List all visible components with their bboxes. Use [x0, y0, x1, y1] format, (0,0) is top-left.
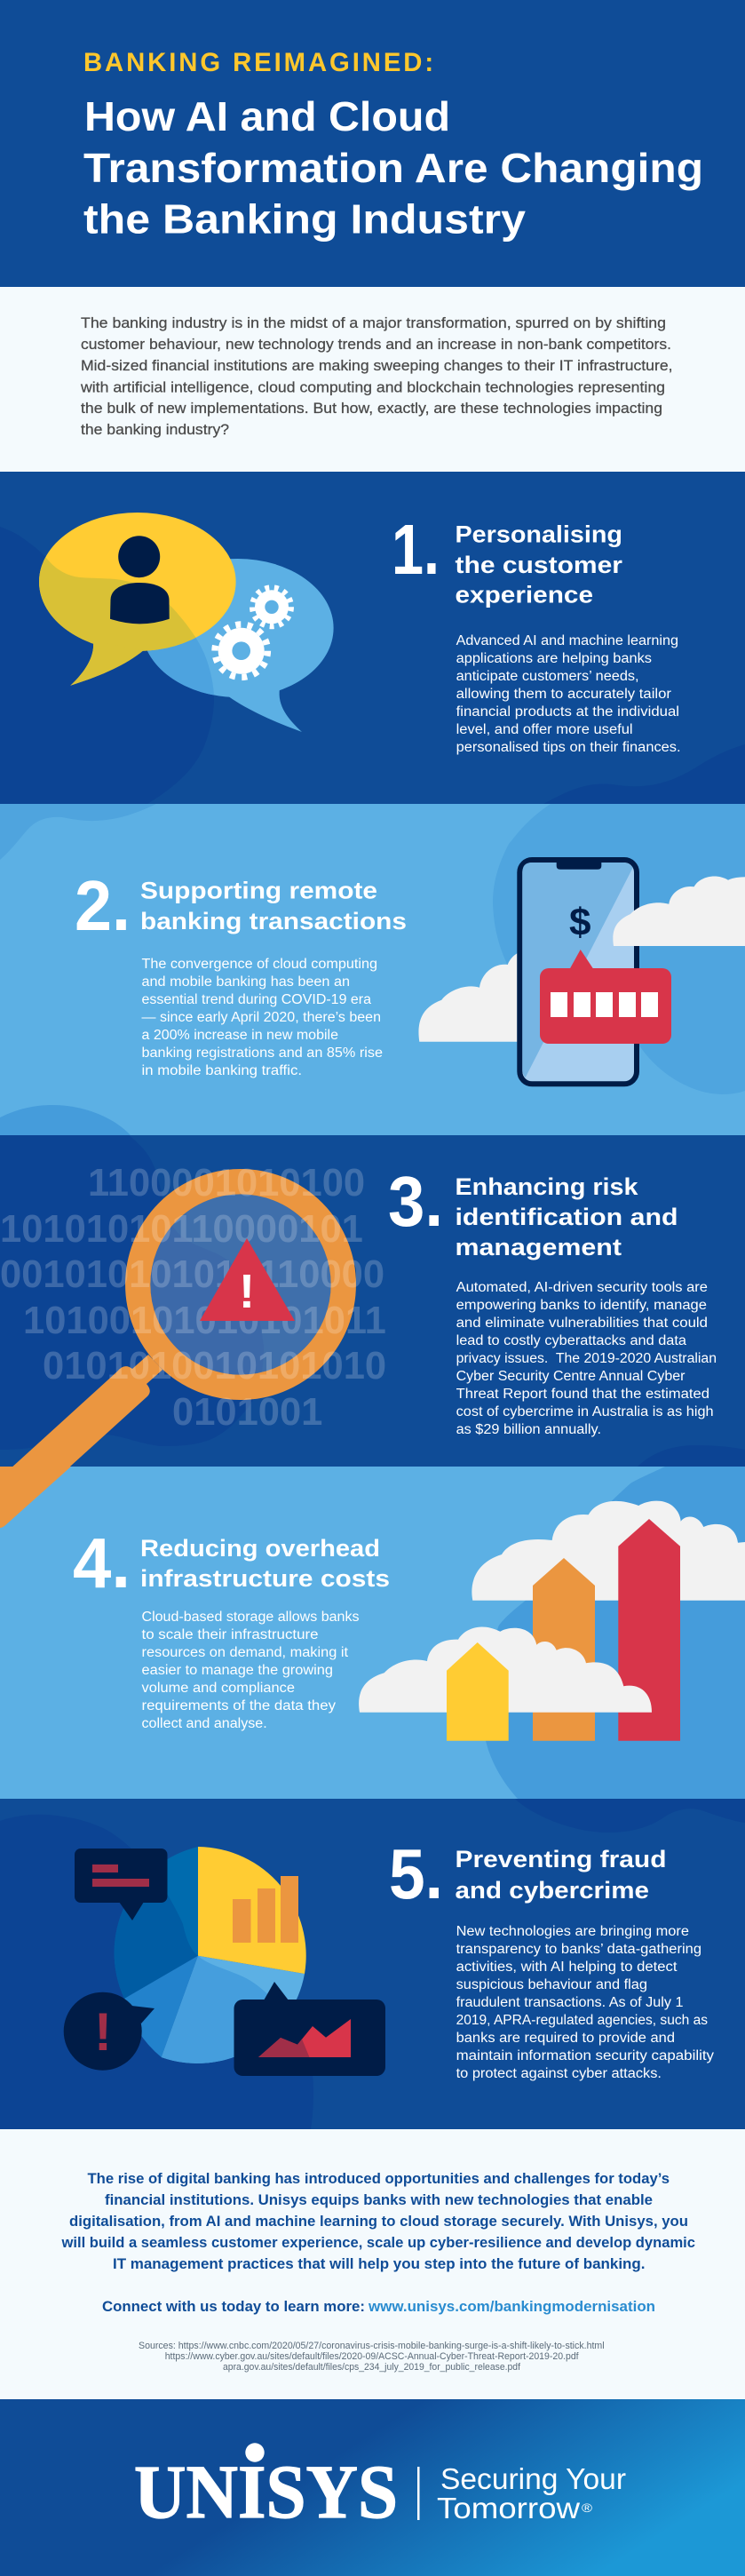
binary digits: 10101010110000101	[0, 1208, 363, 1251]
body text 5	[456, 1924, 714, 2081]
panel: section 2 remote banking	[0, 804, 745, 1135]
icon: warning triangle	[200, 1238, 295, 1321]
closing text: will build a seamless customer experience, scale up cyber-resilience and develop dynamic	[61, 2234, 695, 2251]
body text 3	[456, 1280, 717, 1437]
body text 2: in mobile banking traffic.	[142, 1063, 302, 1078]
body text 3: Threat Report found that the estimated	[456, 1387, 709, 1402]
icon: speech bubbles	[39, 513, 334, 732]
icon: alert speech bubble: !	[94, 2002, 112, 2062]
body text 2	[142, 957, 383, 1078]
body text 1: allowing them to accurately tailor	[456, 687, 671, 702]
body text 4: resources on demand, making it	[142, 1645, 349, 1660]
intro text: customer behaviour, new technology trends and an increase in non-bank competitors.	[81, 336, 671, 353]
body text 4: to scale their infrastructure	[142, 1627, 318, 1642]
closing text	[61, 2170, 695, 2272]
panel: section 3 risk management	[0, 1135, 745, 1528]
body text 4: volume and compliance	[142, 1681, 295, 1696]
title	[83, 93, 703, 242]
heading 1: the customer	[455, 552, 623, 578]
heading 5: Preventing fraud	[455, 1846, 666, 1872]
heading 2	[140, 878, 407, 934]
body text 5: New technologies are bringing more	[456, 1924, 689, 1939]
body text 5: activities, with AI helping to detect	[456, 1960, 678, 1975]
panel: section 4 infrastructure costs	[0, 1467, 745, 1799]
panel: introduction	[0, 287, 745, 472]
body text 4	[142, 1610, 360, 1731]
heading 1: experience	[455, 581, 593, 608]
illustration: smartphone	[519, 860, 637, 1084]
body text 1	[456, 633, 681, 755]
body text 1: personalised tips on their finances.	[456, 740, 681, 755]
panel: section 1 personalising	[0, 472, 745, 804]
body text 4: requirements of the data they	[142, 1698, 336, 1713]
heading 3: Enhancing risk	[455, 1173, 639, 1200]
binary digits: 001010101010110000	[0, 1253, 384, 1296]
body text 4: Cloud-based storage allows banks	[142, 1610, 360, 1625]
panel: conclusion	[0, 2129, 745, 2399]
number 4: 4.	[73, 1523, 131, 1602]
closing text: The rise of digital banking has introduced opportunities and challenges for today’s	[87, 2170, 670, 2187]
body text 2: and mobile banking has been an	[142, 974, 350, 990]
icon: warning triangle: !	[239, 1265, 255, 1318]
magnifier handle	[0, 1355, 162, 1528]
body text 2: The convergence of cloud computing	[142, 957, 377, 972]
body text 5: to protect against cyber attacks.	[456, 2066, 662, 2081]
tagline	[437, 2462, 626, 2524]
heading 5: and cybercrime	[455, 1877, 649, 1904]
tagline: ®	[582, 2500, 593, 2515]
heading 3: management	[455, 1234, 622, 1260]
sources: Sources: https://www.cnbc.com/2020/05/27/coronavirus-crisis-mobile-banking-surge-is-a-shift-likely-to-stick.html	[139, 2341, 605, 2351]
icon: password speech bubble	[540, 950, 671, 1044]
intro text: the banking industry?	[81, 421, 229, 438]
icon: text speech bubble	[75, 1849, 167, 1920]
closing text: financial institutions. Unisys equips banks with new technologies that enable	[105, 2191, 653, 2208]
call to action: www.unisys.com/bankingmodernisation	[368, 2298, 655, 2315]
intro text: the bulk of new implementations. But how, exactly, are these technologies impacting	[81, 400, 662, 417]
logo divider	[417, 2467, 419, 2520]
binary digits: 1100001010100	[88, 1162, 365, 1205]
sources: https://www.cyber.gov.au/sites/default/files/2020-09/ACSC-Annual-Cyber-Threat-Report-2019-20.pdf	[165, 2351, 579, 2362]
number 1: 1.	[392, 510, 440, 589]
sources: apra.gov.au/sites/default/files/cps_234_july_2019_for_public_release.pdf	[223, 2362, 521, 2373]
call to action: Connect with us today to learn more:	[102, 2298, 365, 2315]
body text 2: banking registrations and an 85% rise	[142, 1046, 383, 1061]
illustration: left cloud	[418, 953, 517, 1042]
heading 4: Reducing overhead	[140, 1535, 380, 1562]
logo: Unisys: UNISYS	[134, 2449, 398, 2534]
icon: dollar sign: $	[569, 901, 591, 944]
body text 5: transparency to banks’ data-gathering	[456, 1942, 701, 1957]
body text 3: as $29 billion annually.	[456, 1422, 601, 1437]
body text 5: 2019, APRA-regulated agencies, such as	[456, 2013, 708, 2028]
closing text: digitalisation, from AI and machine learning to cloud storage securely. With Unisys, you	[69, 2213, 688, 2230]
illustration: yellow arrow	[447, 1642, 509, 1741]
intro text	[80, 314, 673, 438]
body text 5: suspicious behaviour and flag	[456, 1977, 647, 1992]
body text 4: easier to manage the growing	[142, 1663, 333, 1678]
heading 1: Personalising	[455, 521, 622, 547]
body text 2: essential trend during COVID-19 era	[142, 992, 371, 1007]
heading 3	[455, 1173, 678, 1260]
heading 4	[140, 1535, 390, 1592]
body text 3: Cyber Security Centre Annual Cyber	[456, 1369, 686, 1384]
icon: area chart bubble	[234, 1982, 385, 2076]
binary digits: 10100101010101011	[23, 1300, 386, 1342]
title: the Banking Industry	[83, 195, 526, 242]
body text 5: banks are required to provide and	[456, 2031, 675, 2046]
illustration: back cloud	[472, 1501, 745, 1601]
heading 5	[455, 1846, 666, 1904]
binary digits: 0101001	[172, 1391, 322, 1434]
sources	[139, 2341, 605, 2373]
body text 5: maintain information security capability	[456, 2048, 714, 2063]
panel: header	[0, 0, 745, 287]
illustration: orange arrow	[533, 1558, 595, 1741]
tagline: Tomorrow	[437, 2492, 580, 2524]
heading 3: identification and	[455, 1204, 678, 1230]
illustration: red arrow	[618, 1519, 680, 1741]
pie chart	[115, 1847, 306, 2063]
heading 2: banking transactions	[140, 908, 407, 934]
panel: section 5 fraud and cybercrime	[0, 1799, 745, 2129]
body text 1: level, and offer more useful	[456, 722, 633, 737]
closing text: IT management practices that will help you step into the future of banking.	[113, 2255, 645, 2272]
tagline: Securing Your	[440, 2462, 626, 2495]
intro text: Mid-sized financial institutions are making sweeping changes to their IT infrastructure,	[81, 357, 673, 374]
body text 1: applications are helping banks	[456, 651, 652, 666]
body text 2: a 200% increase in new mobile	[142, 1028, 338, 1043]
heading 4: infrastructure costs	[140, 1565, 390, 1592]
illustration: right cloud	[613, 877, 745, 946]
binary digits	[0, 1162, 386, 1434]
illustration: front cloud	[359, 1626, 652, 1713]
body text 5: fraudulent transactions. As of July 1	[456, 1995, 684, 2010]
body text 1: Advanced AI and machine learning	[456, 633, 678, 648]
icon: alert speech bubble	[64, 1992, 155, 2071]
body text 3: cost of cybercrime in Australia is as high	[456, 1404, 714, 1419]
body text 3: and eliminate vulnerabilities that could	[456, 1316, 708, 1331]
intro text: with artificial intelligence, cloud computing and blockchain technologies representing	[80, 378, 665, 396]
body text 2: — since early April 2020, there’s been	[142, 1010, 381, 1025]
body text 1: financial products at the individual	[456, 704, 679, 720]
body text 4: collect and analyse.	[142, 1716, 267, 1731]
magnifier handle lower end	[0, 1467, 71, 1528]
heading 2: Supporting remote	[140, 878, 377, 904]
body text 3: lead to costly cyberattacks and data	[456, 1333, 686, 1348]
number 2: 2.	[75, 866, 131, 945]
kicker heading: BANKING REIMAGINED:	[83, 48, 436, 77]
panel: footer	[0, 2399, 745, 2576]
bar chart icon	[233, 1876, 298, 1943]
number 3: 3.	[388, 1162, 443, 1241]
call to action	[102, 2298, 655, 2315]
illustration: magnifying glass	[0, 1181, 344, 1528]
title: How AI and Cloud	[84, 93, 450, 139]
binary digits: 0101010010101010	[43, 1345, 386, 1387]
intro text: The banking industry is in the midst of a major transformation, spurred on by shifting	[81, 314, 666, 331]
number 5: 5.	[389, 1834, 443, 1913]
body text 1: anticipate customers’ needs,	[456, 669, 639, 684]
heading 1	[455, 521, 623, 608]
body text 3: empowering banks to identify, manage	[456, 1298, 707, 1313]
title: Transformation Are Changing	[83, 145, 703, 191]
body text 3: Automated, AI-driven security tools are	[456, 1280, 708, 1295]
body text 3: privacy issues. The 2019-2020 Australian	[456, 1351, 717, 1366]
icon: person	[110, 536, 170, 624]
icon: gears	[215, 588, 291, 677]
